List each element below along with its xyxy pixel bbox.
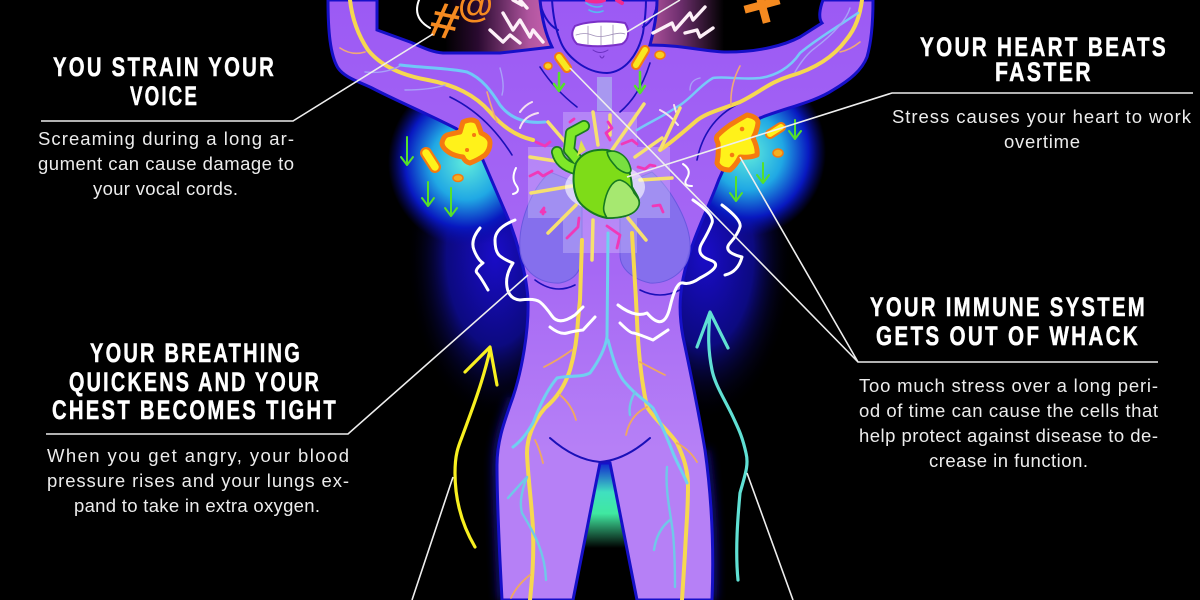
- glow: left flank: [407, 90, 583, 420]
- body text: [47, 445, 349, 516]
- callout: your immune system gets out of whack: [570, 68, 1158, 471]
- heading: YOUR BREATHING: [90, 338, 302, 368]
- blob: left armpit large: [442, 120, 490, 163]
- leader: mouth: [627, 0, 680, 32]
- branch nerves: [340, 42, 860, 122]
- heart rays: [530, 104, 680, 260]
- body text: overtime: [1004, 131, 1080, 152]
- pale ribs squiggles: [473, 164, 742, 340]
- callout: you strain your voice: [38, 34, 433, 199]
- forehead lines: [586, 3, 603, 12]
- callout: your heart beats faster: [627, 32, 1193, 177]
- heading: CHEST BECOMES TIGHT: [52, 395, 338, 425]
- body text: [38, 128, 294, 199]
- nerves: arms and legs: [340, 0, 862, 600]
- lungs: [520, 172, 690, 283]
- arrow: cyan rising: [697, 312, 747, 580]
- blob: right small: [770, 127, 781, 134]
- blob: right dot: [773, 149, 783, 157]
- glow: between legs: [582, 462, 628, 548]
- arrow: yellow rising: [455, 347, 497, 547]
- cyan nerve: right arm: [637, 13, 858, 130]
- glow: left armpit: [388, 78, 544, 246]
- white arm strokes: [520, 102, 678, 128]
- left lung: [520, 172, 582, 283]
- leader line: [41, 34, 433, 121]
- body outline glow: [497, 397, 713, 600]
- figure: stressed body: [328, 0, 873, 600]
- glow: right flank: [617, 90, 793, 420]
- heading: VOICE: [130, 81, 199, 111]
- brows and wrinkles: [587, 0, 622, 3]
- blob: right neck dot: [655, 51, 665, 59]
- central cyan nerve: [513, 233, 608, 447]
- yellow chest nerve left: [527, 240, 582, 600]
- body text: help protect against disease to de-: [859, 425, 1158, 446]
- body text: When you get angry, your blood: [47, 445, 349, 466]
- body creases: [450, 63, 740, 462]
- heading: QUICKENS AND YOUR: [69, 367, 321, 397]
- blob: left spots: [467, 135, 474, 150]
- blob: left dot: [453, 174, 463, 182]
- heading: [52, 338, 338, 425]
- background glow behind head: [445, 0, 745, 58]
- heart glow: [565, 163, 645, 211]
- heart body: [574, 150, 639, 218]
- heart yellow tip: [577, 140, 586, 156]
- heading: [870, 292, 1147, 351]
- blob: left small inner: [426, 153, 435, 167]
- chest highlight cross: [528, 112, 670, 253]
- blob: right neck: [636, 50, 645, 65]
- callout: your breathing quickens: [46, 275, 528, 516]
- right cyan nerve: [608, 340, 687, 483]
- lower cyan branches: [508, 392, 675, 587]
- neck: [597, 77, 612, 111]
- stress blobs: [426, 50, 783, 182]
- leader line: [46, 275, 528, 434]
- heading: [920, 32, 1168, 87]
- face: [540, 0, 657, 73]
- orange branches: [511, 350, 697, 598]
- heading: YOU STRAIN YOUR: [53, 52, 276, 82]
- shout arc: [417, 0, 430, 28]
- blob: left neck inner: [559, 57, 567, 68]
- blob: left neck dot: [544, 62, 552, 70]
- heading: [53, 52, 276, 111]
- cyan nerve: left arm: [400, 65, 545, 122]
- blob: right spots: [732, 129, 742, 155]
- blob: right neck inner: [636, 50, 645, 65]
- blob: left neck: [559, 57, 567, 68]
- heading: FASTER: [995, 57, 1093, 87]
- heart lower lobe: [604, 180, 639, 218]
- body text: Stress causes your heart to work: [892, 106, 1192, 127]
- yellow nerve: right arm: [660, 0, 862, 150]
- curse symbols: [426, 0, 793, 51]
- heart vessels: [557, 126, 584, 169]
- zigzags: anger lines: [490, 0, 713, 43]
- leader lines: [570, 68, 1158, 362]
- body text: crease in function.: [929, 450, 1088, 471]
- glow: right armpit: [670, 68, 826, 236]
- magenta squiggles: [530, 119, 663, 248]
- body text: your vocal cords.: [93, 178, 238, 199]
- leader line: [627, 93, 1193, 177]
- body text: [892, 106, 1192, 152]
- teeth: [572, 21, 628, 46]
- yellow nerve: left arm: [350, 0, 533, 140]
- teeth line: [576, 25, 625, 45]
- body text: od of time can cause the cells that: [859, 400, 1158, 421]
- body text: Screaming during a long ar-: [38, 128, 294, 149]
- jaw and ears: [540, 0, 657, 73]
- body text: gument can cause damage to: [38, 153, 294, 174]
- chin wrinkle: [593, 50, 608, 58]
- body text: Too much stress over a long peri-: [859, 375, 1158, 396]
- green down arrows: [401, 72, 801, 216]
- body silhouette: [328, 0, 873, 600]
- body text: pand to take in extra oxygen.: [74, 495, 320, 516]
- blob: left small: [426, 153, 435, 167]
- heart: [557, 126, 645, 218]
- body text: [859, 375, 1158, 471]
- pale branches: [365, 8, 850, 95]
- blob: right small inner: [770, 127, 781, 134]
- leader: lower left: [412, 477, 453, 600]
- heart atrium: [607, 151, 631, 173]
- blob: right armpit large: [716, 115, 758, 170]
- body text: pressure rises and your lungs ex-: [47, 470, 349, 491]
- heart vessels fill: [557, 126, 584, 169]
- yellow chest nerve right: [632, 233, 688, 600]
- right lung: [620, 172, 690, 283]
- leader: lower right: [747, 473, 793, 600]
